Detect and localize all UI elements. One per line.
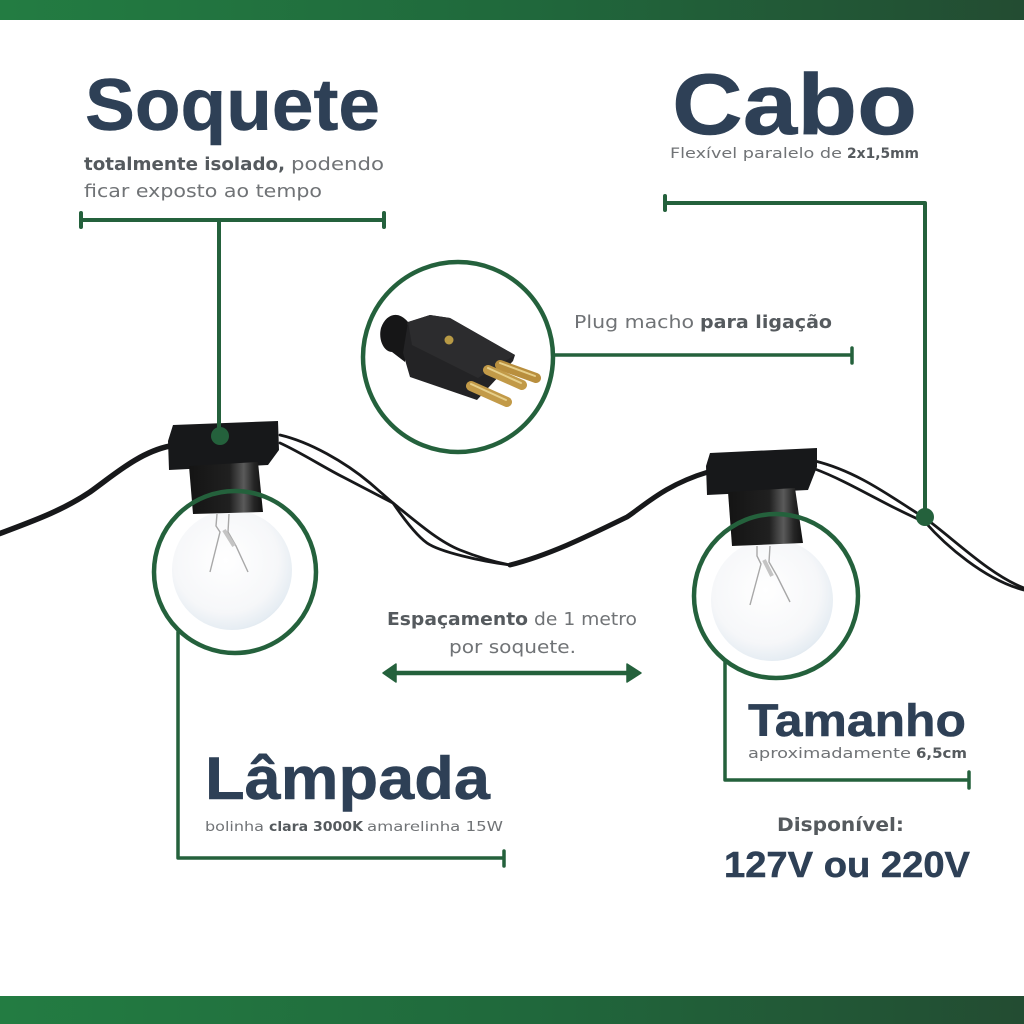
cable: [0, 435, 1024, 590]
arrow: spacing: [383, 664, 641, 682]
bottom bar: [0, 996, 1024, 1024]
text: spacing: por soquete.: [449, 637, 576, 658]
text: tamanho description: [748, 746, 967, 762]
text: disponível label: Disponível:: [777, 814, 904, 836]
text: spacing: Espaçamento: [387, 609, 528, 630]
text: tamanho description: 6,5cm: [916, 746, 967, 762]
text: soquete description: podendo: [291, 154, 384, 175]
callout: cabo bracket: [665, 196, 934, 526]
text: cabo description: 2x1,5mm: [847, 146, 919, 162]
text: soquete description: ficar exposto ao tempo: [84, 181, 322, 202]
lamp 1: socket and bulb: [168, 421, 292, 630]
text: plug label: [574, 313, 832, 333]
text: lâmpada description: bolinha: [205, 819, 264, 835]
text: soquete description: totalmente isolado,: [84, 154, 285, 175]
top bar: [0, 0, 1024, 20]
callout: lamp 2 ring and leader: [694, 514, 969, 788]
text: spacing: [387, 609, 637, 658]
heading: Soquete: Soquete: [85, 65, 380, 146]
text: cabo description: [670, 146, 919, 162]
heading: Cabo: Cabo: [672, 57, 917, 153]
plug photo: [380, 315, 536, 402]
text: tamanho description: aproximadamente: [748, 746, 911, 762]
callout: soquete bracket: [81, 213, 384, 445]
heading: Tamanho: Tamanho: [748, 695, 966, 746]
callout: lamp 1 ring and leader: [154, 491, 504, 866]
heading: Lâmpada: Lâmpada: [205, 745, 491, 812]
text: plug label: para ligação: [700, 313, 832, 333]
lamp 2: socket and bulb: [706, 448, 833, 661]
text: lâmpada description: clara 3000K: [269, 819, 364, 835]
text: soquete description: [84, 154, 384, 202]
callout: plug circle and leader: [363, 262, 852, 452]
text: lâmpada description: [205, 819, 503, 835]
text: plug label: Plug macho: [574, 313, 694, 333]
text: cabo description: Flexível paralelo de: [670, 146, 842, 162]
text: lâmpada description: amarelinha 15W: [367, 819, 503, 835]
text: spacing: de 1 metro: [534, 609, 637, 630]
text: voltage: 127V ou 220V: [724, 844, 970, 885]
